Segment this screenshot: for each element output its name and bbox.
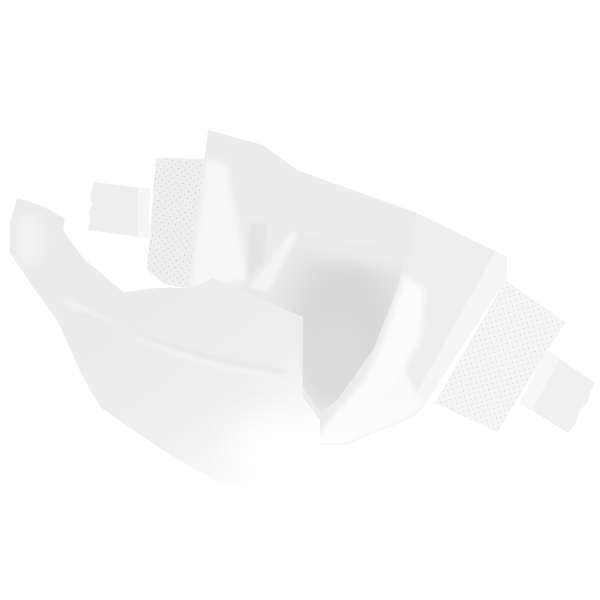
left inner crease (248, 267, 251, 275)
light strip beside left panel (193, 162, 244, 285)
right fastening tab (520, 350, 595, 433)
flap highlight near bottom (230, 418, 340, 482)
cavity upper rim highlight (328, 246, 377, 262)
flap shading upper (16, 212, 44, 268)
flap fold crease (65, 300, 290, 385)
inner cavity shadow (260, 256, 399, 408)
front flap (10, 198, 320, 470)
bright ruffled leg cuff (358, 278, 424, 390)
diaper body: back waistband and inner liner (187, 130, 507, 445)
lower body fading to white (320, 375, 420, 445)
left perforated side panel (147, 158, 207, 288)
left fastening tab (88, 182, 150, 238)
illustration: open white diaper (10, 130, 595, 470)
right perforated side panel (435, 280, 565, 432)
right elastic band (375, 213, 507, 420)
